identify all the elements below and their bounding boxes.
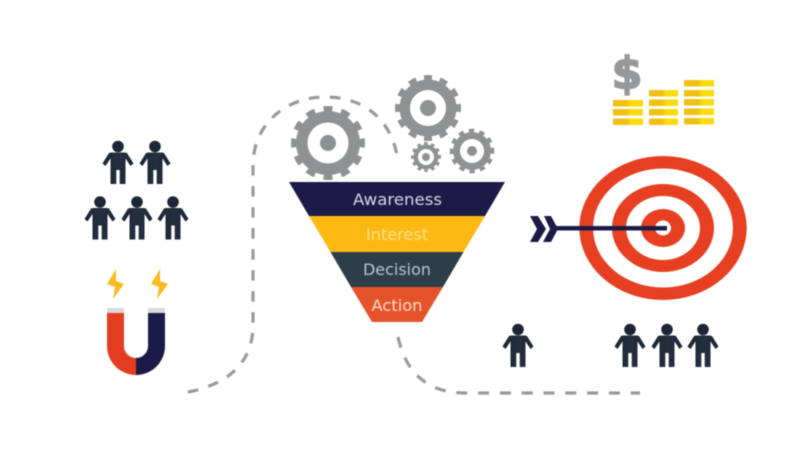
funnel stage: Interest: Interest bbox=[366, 225, 428, 244]
funnel stage: Action bbox=[351, 287, 443, 322]
dashed path: left curve from magnet to funnel bbox=[188, 97, 397, 392]
person: single figure below target bbox=[502, 324, 534, 367]
funnel stage: Interest bbox=[309, 216, 485, 252]
funnel bbox=[289, 182, 505, 322]
icon: target bbox=[579, 156, 747, 300]
icon: magnet bbox=[107, 308, 165, 375]
funnel stage: Awareness bbox=[289, 182, 505, 216]
funnel stage: Action: Action bbox=[372, 296, 422, 315]
icon: small gear bbox=[412, 144, 440, 170]
icon: large gear bbox=[294, 109, 362, 177]
icon: top gear bbox=[398, 78, 458, 138]
dashed path: funnel to customers bbox=[398, 337, 640, 393]
funnel stage: Decision: Decision bbox=[363, 260, 431, 279]
funnel stage: Decision bbox=[330, 252, 464, 287]
icon: arrow bbox=[530, 216, 667, 242]
people group: top left, row two bbox=[84, 196, 188, 240]
people group: top left, row one bbox=[102, 141, 170, 184]
icon: lightning bolts bbox=[107, 269, 168, 299]
funnel stage: Awareness: Awareness bbox=[353, 190, 442, 209]
icon: coin stacks bbox=[613, 80, 714, 125]
icon: dollar sign: $ bbox=[612, 48, 642, 99]
people group: three figures below target bbox=[614, 324, 718, 367]
icon: medium gear bbox=[452, 130, 492, 172]
